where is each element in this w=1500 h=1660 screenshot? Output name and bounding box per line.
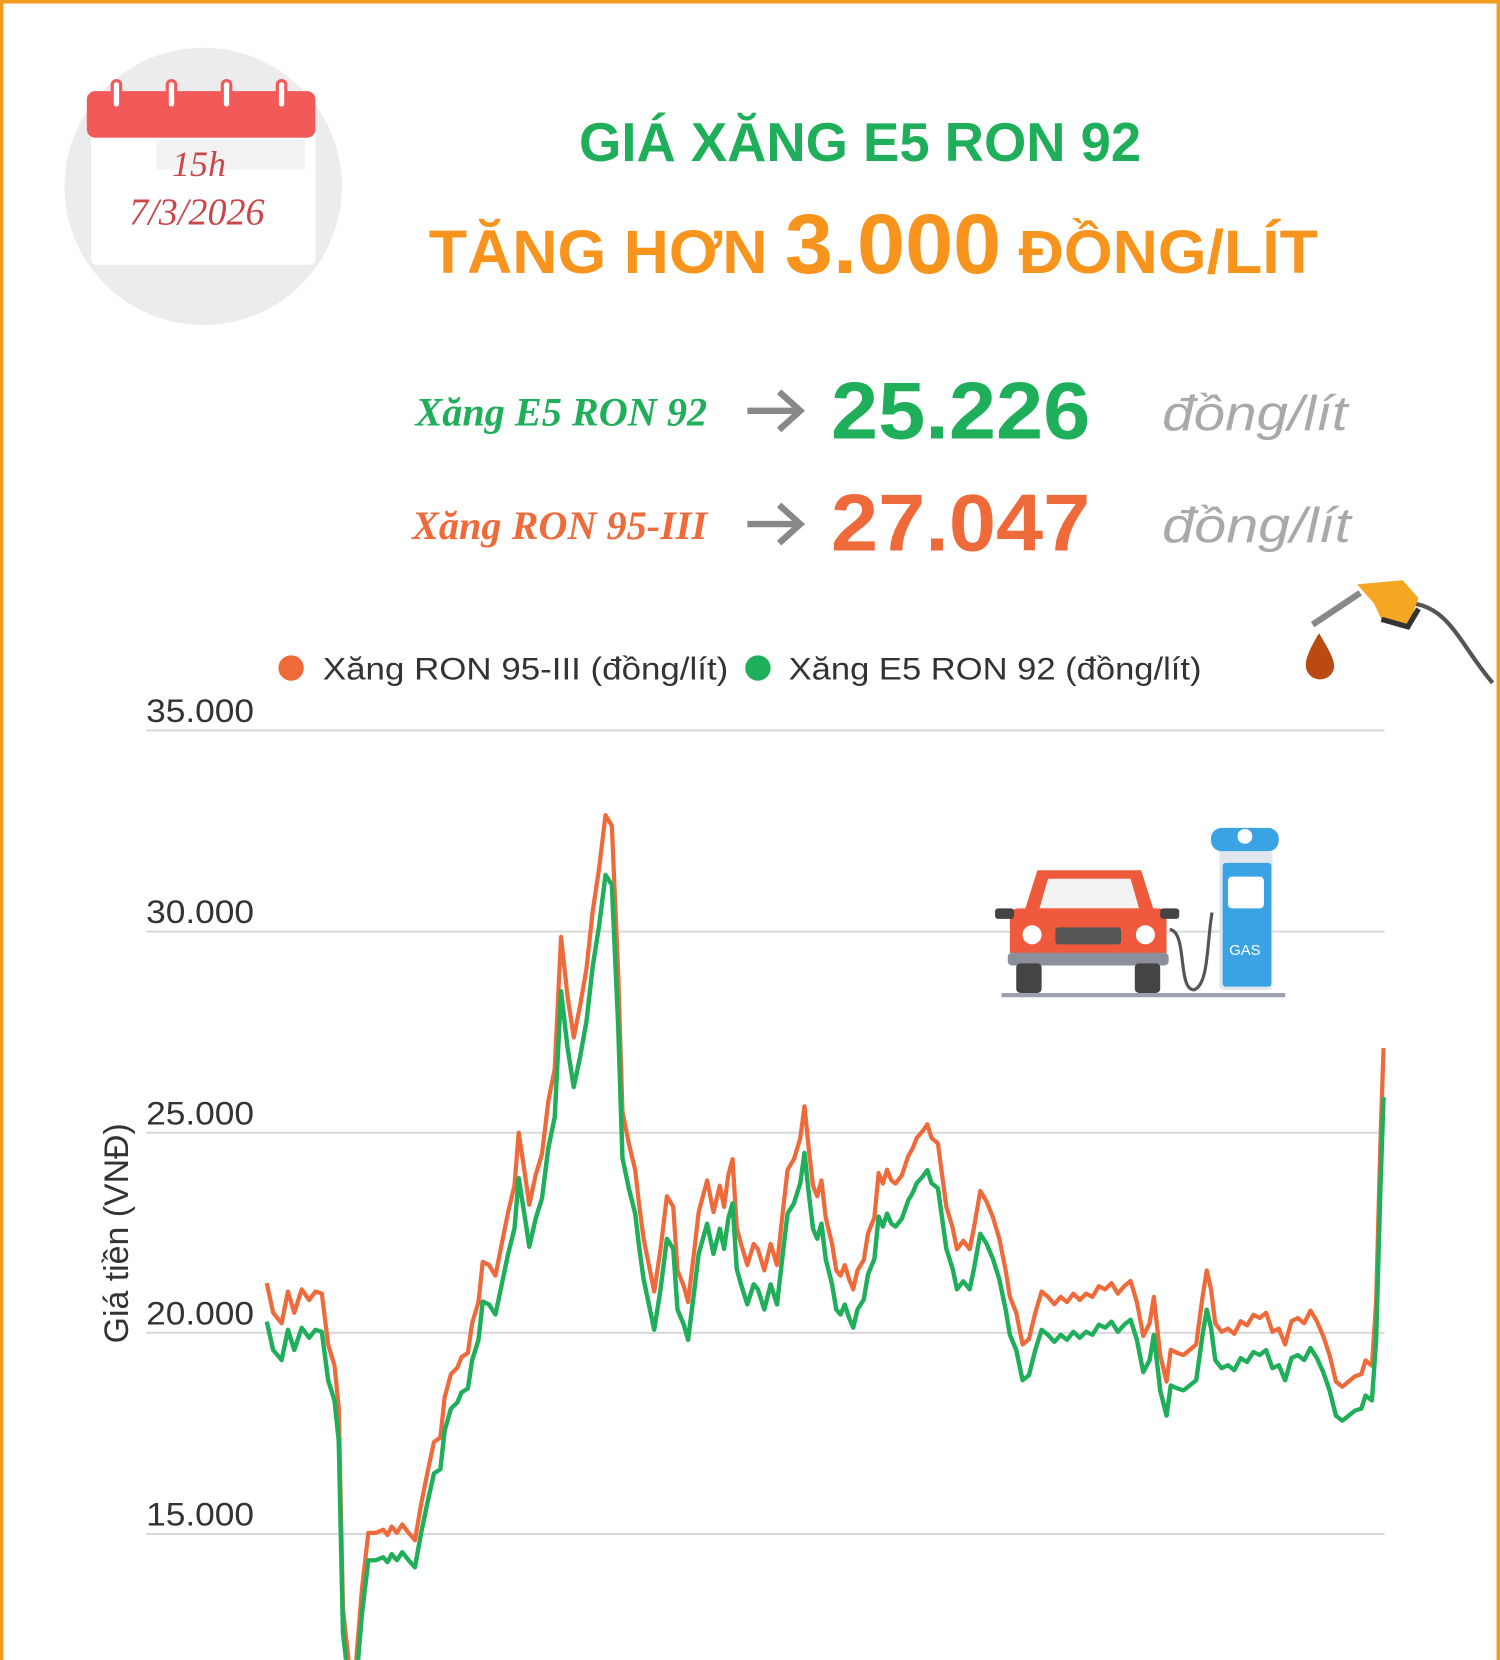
chart: gridlines and y labels: 15.000 (146, 1495, 254, 1532)
row: E5 RON 92 price (413, 366, 1350, 456)
chart: gridlines and y labels: 30.000 (146, 893, 254, 930)
row: E5 RON 92 price: Xăng E5 RON 92 (413, 390, 707, 435)
legend: Xăng RON 95-III (đồng/lít) (323, 651, 728, 687)
chart: gridlines and y labels: 25.000 (146, 1094, 254, 1131)
line chart (267, 815, 1384, 1660)
row: RON 95-III price: Xăng RON 95-III (410, 503, 708, 548)
row: RON 95-III price: đồng/lít (1162, 499, 1354, 553)
row: E5 RON 92 price: 25.226 (831, 366, 1090, 456)
icon: fuel nozzle (1306, 580, 1493, 683)
row: RON 95-III price: 27.047 (831, 479, 1090, 569)
legend: Xăng E5 RON 92 (đồng/lít) (789, 651, 1201, 687)
chart: gridlines and y labels: 35.000 (146, 692, 254, 729)
icon: car at gas pump: GAS (1229, 943, 1261, 959)
icon: car at gas pump (995, 828, 1285, 997)
axis title: Giá tiền (VNĐ) (98, 1123, 136, 1343)
icon: calendar: 15h (172, 144, 226, 184)
icon: calendar: 7/3/2026 (129, 191, 265, 233)
row: E5 RON 92 price: đồng/lít (1162, 387, 1350, 441)
chart: gridlines and y labels: 20.000 (146, 1294, 254, 1331)
title line 1: GIÁ XĂNG E5 RON 92 (579, 111, 1141, 173)
chart: gridlines and y labels (146, 692, 1385, 1534)
icon: calendar (65, 48, 342, 325)
row: RON 95-III price (410, 479, 1354, 569)
legend (278, 651, 1201, 687)
title line 2: TĂNG HƠN 3.000 ĐỒNG/LÍT (429, 196, 1318, 291)
